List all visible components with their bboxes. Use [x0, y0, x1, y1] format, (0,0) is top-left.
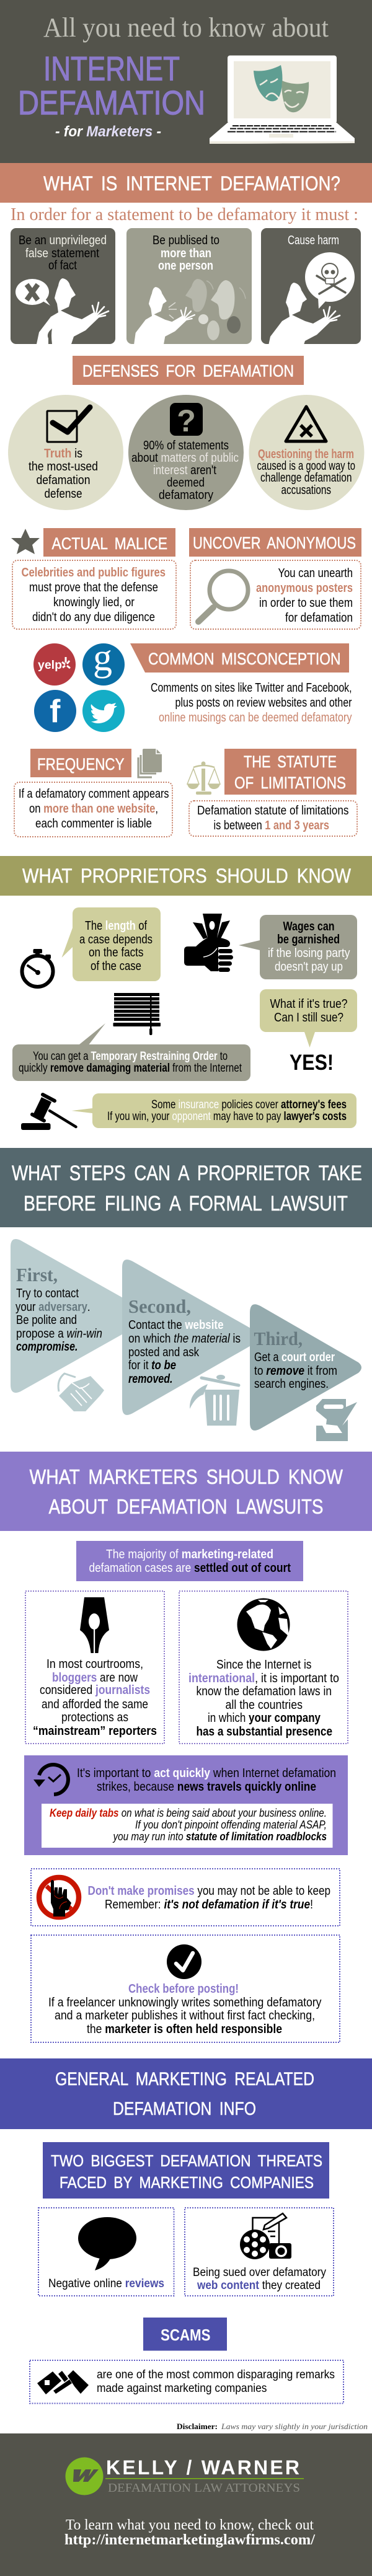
callout: insurance and lawyer's costs: [72, 1093, 356, 1128]
heading: two biggest threats: TWO BIGGEST DEFAMATION THREATS: [51, 2151, 322, 2170]
icon: twitter: [82, 690, 125, 732]
panel text: [48, 1982, 321, 2036]
heading: the statute of limitations: [224, 749, 356, 795]
panel text: [188, 1658, 339, 1739]
callout: keep daily tabs: you may run into statute of limitation roadblocks: [112, 1830, 327, 1843]
icon: facebook: [34, 690, 76, 732]
panel text: It's important to act quickly when Internet defamation: [77, 1767, 336, 1780]
callout: length of a case: [62, 907, 161, 981]
callout: wages can be garnished: [239, 915, 357, 979]
icon: handshake: [58, 1374, 104, 1411]
circle text: the most-used: [29, 460, 98, 474]
banner: general marketing related info: [0, 2058, 372, 2129]
panel: questioning the harm circle: [249, 395, 365, 510]
step text: [254, 1351, 337, 1391]
step heading: second: Second,: [128, 1295, 191, 1317]
panel: first step: [11, 1239, 155, 1411]
callout: wages can be garnished: if the losing party: [268, 946, 350, 960]
icon: gavel: [21, 1095, 76, 1130]
panel text: If a freelancer unknowingly writes something defamatory: [48, 1996, 321, 2009]
card text: Cause harm: [288, 234, 339, 247]
callout: keep daily tabs: [42, 1804, 332, 1848]
callout: length of a case: of the case: [91, 959, 141, 973]
icon: magnifying glass: [198, 571, 248, 622]
panel text: in which your company: [208, 1711, 321, 1725]
panel text: Since the Internet is: [216, 1658, 311, 1672]
panel: actual malice text: Celebrities and public figures: [21, 566, 166, 580]
panel: statute text: is between 1 and 3 years: [213, 819, 329, 832]
firm descriptor: DEFAMATION LAW ATTORNEYS: [108, 2481, 300, 2495]
circle text: accusations: [281, 483, 331, 497]
callout: temporary restraining order: You can get a Temporary Restraining Order to: [33, 1050, 228, 1063]
card text: more than: [161, 247, 211, 260]
panel: check before posting: [31, 1935, 340, 2042]
banner: what steps can a proprietor take: [0, 1148, 372, 1227]
disclaimer: Disclaimer:: [177, 2422, 218, 2431]
panel: actual malice text: [12, 560, 176, 629]
panel text: are one of the most common disparaging remarks: [97, 2368, 335, 2381]
panel: unprivileged false statement: [11, 228, 115, 344]
icon: google: g: [93, 637, 112, 679]
panel text: know the defamation laws in: [196, 1685, 332, 1698]
card text: Be an unprivileged: [19, 234, 107, 247]
step text: search engines.: [254, 1377, 329, 1391]
panel: second step: [122, 1259, 266, 1426]
heading: scams: SCAMS: [161, 2326, 211, 2344]
step text: Get a court order: [254, 1351, 335, 1364]
step text: propose a win-win: [16, 1327, 102, 1341]
callout: length of a case: on the facts: [89, 946, 144, 959]
panel text: anonymous posters: [256, 581, 353, 595]
panel: truth circle: [8, 395, 123, 510]
firm name: KELLY / WARNER: [106, 2456, 299, 2479]
icon: globe: [237, 1598, 290, 1651]
heading: actual malice: [43, 528, 175, 557]
heading: uncover anonymous: [189, 528, 361, 557]
icon: window blinds: [113, 993, 161, 1035]
callout: temporary restraining order: [12, 1023, 250, 1081]
icon: laptop with theatre masks: [210, 56, 355, 144]
icon: documents: [138, 749, 162, 777]
icon: person talking to many faces: [133, 279, 246, 348]
icon: scales of justice: [187, 761, 220, 795]
call to action: To learn what you need to know, check out: [66, 2517, 314, 2533]
step heading: third: Third,: [254, 1328, 303, 1349]
icon: question mark: [170, 403, 203, 438]
panel text: bloggers are now: [52, 1671, 138, 1685]
icon: fist holding money: [184, 914, 233, 972]
callout: keep daily tabs: Keep daily tabs on what is being said about your business online.: [50, 1807, 327, 1819]
banner: general marketing related info: DEFAMATION INFO: [113, 2099, 256, 2119]
panel text: [193, 2266, 326, 2292]
step text: Contact the website: [128, 1318, 223, 1332]
callout: wages can be garnished: Wages can: [283, 920, 335, 933]
panel: bloggers are journalists: [25, 1591, 164, 1744]
banner: what is internet defamation: [0, 163, 372, 203]
callout: settled out of court: The majority of marketing-related: [106, 1548, 273, 1561]
icon: facebook: f: [50, 694, 61, 730]
heading: frequency: FREQUENCY: [37, 755, 124, 774]
panel: public interest circle: [128, 395, 244, 510]
icon: pen nib: [80, 1597, 109, 1653]
panel text: all the countries: [226, 1698, 303, 1712]
heading: common misconception: COMMON MISCONCEPTION: [148, 650, 341, 668]
website url: http://internetmarketinglawfirms.com/: [64, 2532, 315, 2548]
banner: what proprietors should know: [0, 856, 372, 896]
circle text: defamation: [36, 474, 91, 487]
panel: published to more than one person: [126, 228, 252, 348]
icon: kelly warner logo: [66, 2457, 103, 2495]
title: internet: INTERNET: [43, 50, 180, 88]
panel: statute text: Defamation statute of limitations: [197, 804, 348, 818]
icons: social networks: [33, 637, 125, 732]
icon: person with X speech bubble: [16, 278, 108, 344]
circle text: [257, 448, 355, 497]
panel: frequency text: each commenter is liable: [35, 817, 152, 831]
icon: question mark: ?: [177, 404, 196, 438]
panel: defamatory web content: [185, 2208, 334, 2296]
callout: wages can be garnished: doesn't pay up: [275, 960, 343, 974]
card text: [19, 234, 107, 273]
panel text: [256, 567, 353, 625]
callout: insurance and lawyer's costs: Some insurance policies cover attorney's fees: [151, 1098, 347, 1111]
card text: of fact: [48, 259, 77, 273]
step text: Try to contact: [16, 1287, 79, 1300]
step text: [16, 1287, 102, 1354]
panel text: web content they created: [197, 2279, 321, 2292]
icon: person with skull speech bubble: [268, 252, 355, 348]
card text: one person: [158, 259, 213, 273]
step text: removed.: [128, 1372, 172, 1386]
callout: settled out of court: [76, 1541, 303, 1581]
circle text: defamatory: [159, 488, 213, 502]
callout: length of a case: The length of: [85, 919, 147, 933]
answer: yes: YES!: [290, 1051, 334, 1075]
callout: wages can be garnished: be garnished: [277, 933, 340, 946]
card text: Be publised to: [153, 234, 219, 247]
panel text: in order to sue them: [259, 596, 353, 610]
icon: yelp: [33, 643, 76, 686]
panel: frequency text: [14, 782, 172, 837]
heading: the statute of limitations: THE STATUTE: [244, 752, 337, 771]
banner: general marketing related info: GENERAL MARKETING REALATED: [55, 2069, 314, 2089]
panel: scams text: [30, 2360, 343, 2404]
panel: statute text: [189, 801, 357, 836]
card text: [153, 234, 219, 273]
divider line under firm name: [105, 2478, 304, 2479]
heading: scams: [143, 2318, 227, 2350]
footer panel: [0, 2433, 372, 2576]
callout: what if it's true: [260, 989, 357, 1048]
title: defamation: DEFAMATION: [18, 83, 205, 121]
heading: two biggest threats: [43, 2142, 329, 2199]
icon: warning triangle: [286, 407, 326, 441]
panel: act quickly: [24, 1755, 348, 1855]
intro sentence: In order for a statement to be defamatory it must :: [11, 205, 358, 224]
subtitle: - for Marketers -: [55, 123, 161, 140]
heading: defenses for defamation: DEFENSES FOR DEFAMATION: [82, 362, 294, 381]
callout: what if it's true: What if it's true?: [270, 997, 347, 1011]
panel text: Check before posting!: [128, 1982, 239, 1996]
icon: speech bubble: [78, 2217, 136, 2270]
panel text: has a substantial presence: [196, 1725, 332, 1739]
callout: keep daily tabs: If you don't pinpoint offending material ASAP,: [135, 1819, 327, 1831]
circle text: 90% of statements: [143, 439, 229, 452]
heading: common misconception: [130, 643, 349, 673]
panel: frequency text: If a defamatory comment appears: [19, 787, 169, 801]
heading: actual malice: ACTUAL MALICE: [52, 534, 167, 553]
icon: clock arrow: [33, 1765, 68, 1794]
circle text: about matters of public: [131, 451, 239, 465]
icon: document and pen: [316, 1399, 357, 1441]
disclaimer: Laws may vary slightly in your jurisdiction: [221, 2422, 368, 2431]
step text: Be polite and: [16, 1313, 77, 1327]
header panel: [0, 0, 372, 163]
banner: what marketers should know: ABOUT DEFAMATION LAWSUITS: [48, 1495, 324, 1518]
step text: for it to be: [128, 1359, 176, 1372]
circle text: deemed: [167, 476, 205, 490]
title: intro line: All you need to know about: [43, 12, 329, 43]
circle text: interest aren't: [153, 464, 216, 477]
icon: film reel, document and camera: [240, 2213, 291, 2259]
step text: to remove it from: [254, 1364, 337, 1378]
panel text: [33, 1657, 157, 1738]
circle text: [29, 447, 98, 501]
icon: star: [11, 529, 40, 554]
banner: what marketers should know: [0, 1452, 372, 1531]
icon: check mark: [167, 1944, 202, 1979]
heading: frequency: [30, 749, 131, 777]
callout: insurance and lawyer's costs: If you win, your opponent may have to pay lawyer's costs: [107, 1110, 347, 1123]
panel text: the marketer is often held responsible: [87, 2022, 282, 2036]
panel: frequency text: on more than one website,: [29, 802, 158, 816]
callout: length of a case: a case depends: [79, 933, 153, 946]
heading: two biggest threats: FACED BY MARKETING COMPANIES: [60, 2173, 314, 2192]
icon: checkbox: [47, 407, 90, 442]
icon: google: [82, 637, 125, 686]
panel text: [77, 1767, 336, 1794]
step text: compromise.: [16, 1340, 78, 1354]
panel: cause harm: [261, 228, 361, 348]
step heading: first: First,: [16, 1264, 58, 1286]
panel text: international, it is important to: [188, 1672, 339, 1685]
panel: actual malice text: didn't do any due diligence: [32, 611, 155, 624]
panel text: [88, 1884, 330, 1912]
callout: settled out of court: defamation cases are settled out of court: [89, 1561, 291, 1575]
callout: what if it's true: Can I still sue?: [274, 1011, 343, 1025]
panel text: considered journalists: [40, 1683, 150, 1697]
panel: internet is international: [179, 1591, 348, 1744]
panel text: strikes, because news travels quickly online: [97, 1780, 316, 1794]
panel text: Remember: it's not defamation if it's true!: [105, 1898, 313, 1912]
panel text: Being sued over defamatory: [193, 2266, 326, 2279]
panel text: In most courtrooms,: [46, 1657, 143, 1671]
step text: on which the material is: [128, 1332, 241, 1346]
panel text: for defamation: [285, 611, 353, 625]
card text: false statement: [25, 247, 99, 260]
panel text: and a marketer publishes it without first fact checking,: [55, 2009, 315, 2022]
panel text: Negative online reviews: [48, 2277, 164, 2290]
text: common misconception: [151, 681, 352, 725]
panel text: and afforded the same: [42, 1698, 148, 1711]
icon: stopwatch: [22, 949, 53, 987]
step text: posted and ask: [128, 1346, 200, 1359]
heading: defenses for defamation: [73, 356, 304, 385]
circle text: defense: [45, 487, 82, 501]
panel text: made against marketing companies: [97, 2382, 267, 2395]
panel text: “mainstream” reporters: [33, 1724, 157, 1738]
panel text: protections as: [61, 1711, 128, 1724]
panel: actual malice text: knowingly lied, or: [53, 596, 135, 609]
panel text: You can unearth: [278, 567, 353, 580]
icon: yelp: yelp: [38, 659, 62, 672]
callout: temporary restraining order: quickly remove damaging material from the Internet: [19, 1062, 242, 1075]
panel: uncover anonymous text: [190, 560, 361, 629]
icon: hands exchanging cards: [37, 2370, 89, 2394]
panel: don't make promises: [31, 1869, 340, 1926]
heading: the statute of limitations: OF LIMITATIONS: [234, 774, 346, 792]
circle text: Truth is: [44, 447, 82, 461]
icon: trash can: [190, 1375, 239, 1426]
panel: third step: [250, 1304, 361, 1441]
panel: negative online reviews: [38, 2208, 174, 2296]
step text: your adversary.: [16, 1300, 90, 1314]
step text: [128, 1318, 241, 1386]
panel text: Don't make promises you may not be able to keep: [88, 1884, 330, 1898]
panel text: [97, 2368, 335, 2395]
panel: actual malice text: must prove that the defense: [29, 581, 158, 594]
circle text: [131, 439, 239, 502]
icon: prohibited hand: [39, 1877, 79, 1917]
